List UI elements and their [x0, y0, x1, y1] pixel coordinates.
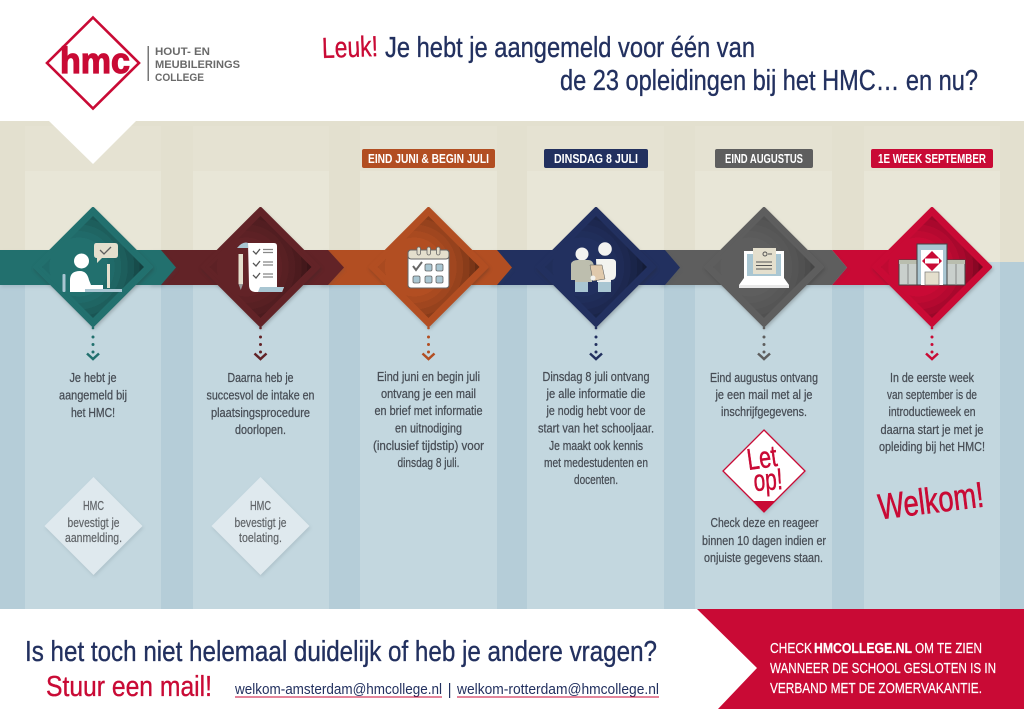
text step 6: daarna start je met je [880, 422, 984, 437]
text step 4: je nodig hebt voor de [546, 403, 646, 418]
callout: bevestigt aanmelding [44, 477, 142, 575]
text step 5: Eind augustus ontvang [710, 370, 818, 385]
text step 1: aangemeld bij [59, 388, 127, 402]
text step 1: Je hebt je [70, 370, 116, 385]
text step 2 [206, 370, 314, 437]
date badge: eind augustus: EIND AUGUSTUS [725, 152, 803, 166]
text: check gegevens: Check deze en reageer [710, 515, 819, 530]
connector 1 [87, 327, 99, 359]
callout: bevestigt toelating: toelating. [239, 531, 282, 545]
text step 2: plaatsingsprocedure [211, 405, 310, 420]
red callout: HMCOLLEGE.NL [814, 641, 912, 657]
text step 4: docenten. [574, 472, 618, 487]
text step 5 [710, 370, 818, 419]
red callout [697, 609, 1024, 709]
text step 4: start van het schooljaar. [538, 420, 654, 436]
text step 6 [879, 370, 985, 454]
text: check gegevens [702, 515, 827, 565]
text step 3: (inclusief tijdstip) voor [373, 438, 485, 453]
title: Leuk! [321, 31, 378, 65]
callout: bevestigt toelating: bevestigt je [234, 516, 287, 530]
date badge: 1e week september: 1E WEEK SEPTEMBER [878, 152, 986, 166]
red callout: CHECK [770, 641, 812, 657]
email addresses: welkom-amsterdam@hmcollege.nl [234, 681, 442, 698]
text step 6: van september is de [887, 387, 977, 402]
text step 6: In de eerste week [890, 370, 974, 385]
logo: COLLEGE [155, 72, 204, 84]
icon: checklist scroll [237, 243, 284, 292]
logo: MEUBILERINGS [155, 59, 240, 71]
text step 2: Daarna heb je [228, 370, 294, 385]
connector 2 [254, 327, 266, 359]
connector 4 [590, 327, 602, 359]
date badge: eind juni [362, 149, 495, 168]
icon: calendar [408, 247, 449, 288]
icon: laptop with letter [739, 248, 789, 288]
text step 2: doorlopen. [235, 422, 286, 437]
red callout: VERBAND MET DE ZOMERVAKANTIE. [770, 681, 982, 697]
email addresses: welkom-rotterdam@hmcollege.nl [456, 681, 659, 698]
text step 3: Eind juni en begin juli [377, 369, 480, 384]
email addresses [234, 681, 659, 698]
callout: bevestigt toelating: HMC [250, 499, 271, 513]
callout: let op [723, 430, 805, 512]
icon: person at laptop [62, 243, 122, 292]
text: check gegevens: onjuiste gegevens staan. [704, 550, 823, 565]
text step 3: en brief met informatie [374, 403, 482, 418]
text: check gegevens: binnen 10 dagen indien er [702, 533, 827, 548]
text step 6: opleiding bij het HMC! [879, 439, 985, 454]
text step 4: je alle informatie die [546, 386, 646, 401]
text step 2: succesvol de intake en [206, 388, 314, 402]
footer panel [0, 609, 1024, 709]
title [321, 31, 978, 97]
connector 5 [758, 327, 770, 359]
step 4 diamond [538, 209, 654, 325]
text step 3: dinsdag 8 juli. [398, 455, 460, 470]
text step 3: en uitnodiging [395, 420, 462, 436]
connector 3 [422, 327, 434, 359]
date badge: dinsdag 8 juli: DINSDAG 8 JULI [554, 152, 638, 166]
callout: let op: Let [745, 440, 780, 477]
title: Je hebt je aangemeld voor één van [385, 32, 755, 64]
logo: HOUT- EN [155, 46, 210, 58]
step 3 diamond [370, 209, 486, 325]
connector 6 [926, 327, 938, 359]
text step 3: ontvang je een mail [381, 386, 476, 401]
text step 5: je een mail met al je [715, 387, 812, 402]
welkom: Welkom! [876, 474, 986, 527]
step 6 diamond [874, 209, 990, 325]
footer question: Is het toch niet helemaal duidelijk of heb je andere vragen? [25, 636, 657, 668]
icon: two people with paper [571, 242, 616, 292]
date badge: 1e week september [871, 149, 993, 168]
callout: bevestigt aanmelding: HMC [83, 499, 104, 513]
text step 4: Je maakt ook kennis [549, 438, 643, 453]
red callout: OM TE ZIEN [915, 641, 982, 657]
logo [47, 18, 240, 108]
date badge: eind juni: EIND JUNI & BEGIN JULI [368, 152, 489, 166]
step 1 diamond [35, 209, 151, 325]
callout: bevestigt toelating [212, 477, 310, 575]
date badge: eind augustus [715, 149, 813, 168]
white header notch [49, 121, 136, 164]
text step 4 [538, 369, 654, 487]
icon: school building [899, 244, 965, 285]
text step 5: inschrijfgegevens. [721, 404, 807, 419]
text step 6: introductieweek en [888, 404, 976, 419]
callout: let op: op! [752, 463, 784, 498]
stuur een mail: Stuur een mail! [46, 671, 212, 703]
callout: bevestigt aanmelding: aanmelding. [65, 531, 122, 545]
timeline arrows [0, 250, 940, 285]
text step 4: Dinsdag 8 juli ontvang [542, 369, 650, 384]
text step 1: het HMC! [71, 405, 115, 420]
date badge: dinsdag 8 juli [544, 149, 648, 168]
text step 4: met medestudenten en [544, 455, 648, 470]
step 2 diamond [202, 209, 318, 325]
logo: hmc [60, 40, 130, 81]
callout: bevestigt aanmelding: bevestigt je [68, 516, 120, 530]
text step 3 [373, 369, 485, 470]
step 5 diamond [706, 209, 822, 325]
text step 1 [59, 370, 127, 420]
